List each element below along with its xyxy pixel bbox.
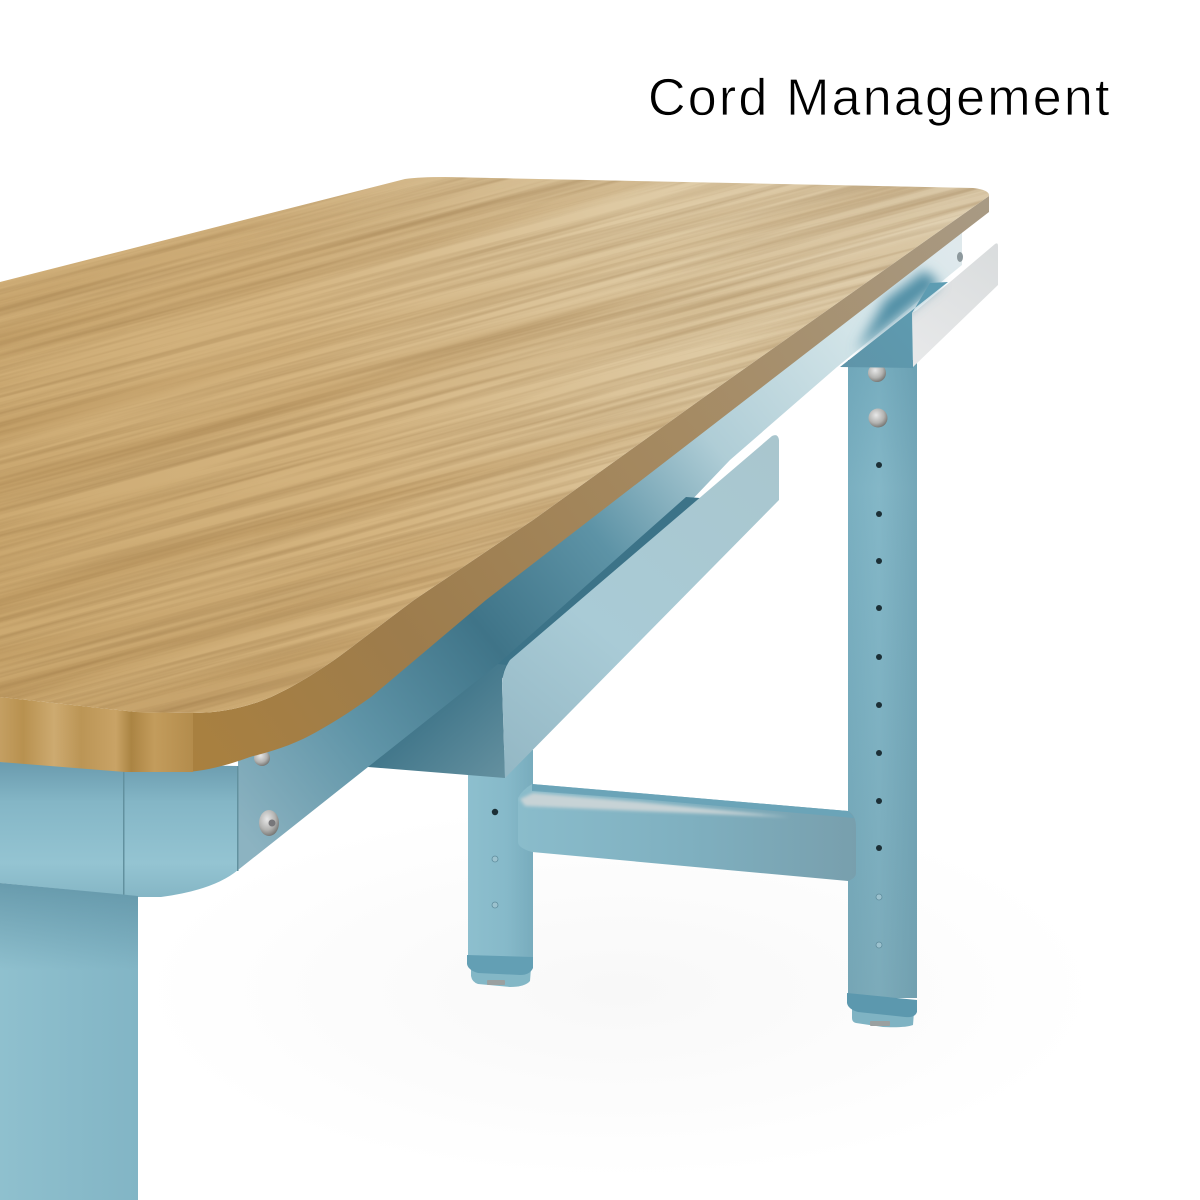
bracket upper bolt: [254, 750, 270, 766]
desk rail: [238, 225, 963, 870]
tray end panel: [368, 660, 507, 778]
tray front face: [502, 435, 779, 778]
far leg holes: [876, 462, 882, 851]
tray inner slot: [498, 497, 700, 665]
desktop top surface: [0, 177, 989, 713]
floor shadow: [140, 800, 1100, 1180]
far leg: [847, 360, 917, 1027]
wood grain: [0, 177, 989, 713]
white far cord tray: [912, 243, 998, 367]
title: Cord Management: [648, 69, 1112, 127]
near leg of far frame: [467, 750, 533, 987]
near leg foot: [467, 955, 533, 987]
main pedestal column: [0, 883, 138, 1200]
far leg lower bolt: [868, 408, 888, 428]
crossbar: [518, 784, 856, 881]
bracket lower bolt: [259, 810, 279, 836]
desktop front edge: [0, 697, 193, 772]
far bracket: [840, 282, 948, 368]
desk illustration: [0, 177, 998, 1200]
desktop side edge: [186, 196, 989, 772]
far leg foot: [847, 993, 917, 1027]
rail end screw: [957, 252, 963, 262]
far leg upper bolt: [868, 364, 886, 382]
bamboo desktop: [0, 177, 989, 772]
blue cord tray: [368, 435, 779, 778]
far leg lower holes: [876, 894, 882, 948]
near leg holes: [492, 809, 498, 815]
desk end bracket: [0, 750, 279, 897]
